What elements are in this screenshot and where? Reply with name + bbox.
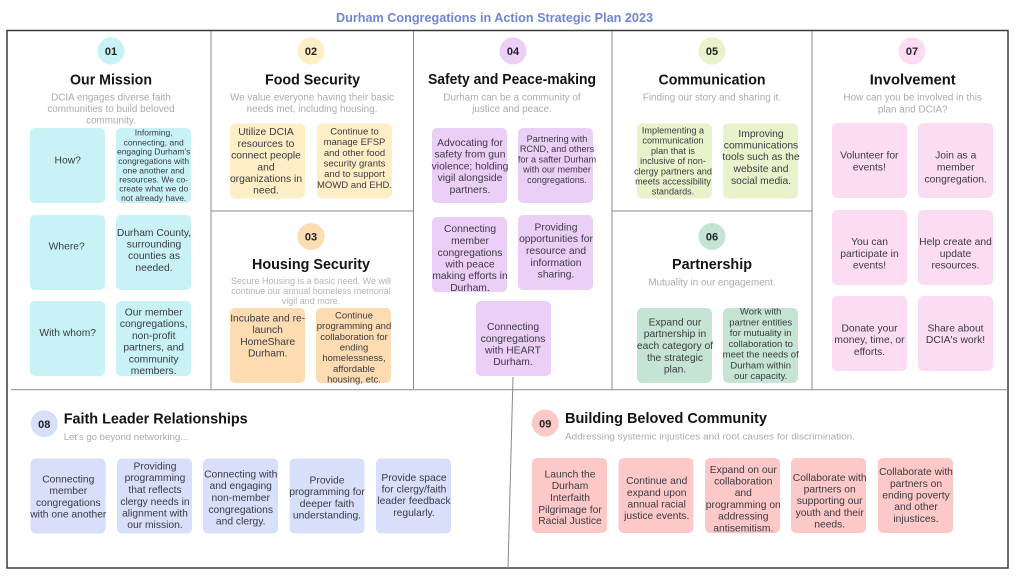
heading: Partnership: Partnership — [672, 256, 752, 273]
number badge 09: 09 — [539, 418, 551, 430]
card: ending homelessness: programming and — [317, 321, 391, 332]
card: with whom answer: community — [129, 354, 179, 365]
card: connecting members: Connecting — [42, 474, 95, 486]
card: utilize resources: need. — [253, 186, 279, 197]
card: advocating: safety from gun — [435, 150, 506, 160]
card: communications tools — [722, 124, 800, 198]
panel: 08 Faith Leader Relationships — [29, 410, 451, 534]
intro text: DCIA engages diverse faith — [51, 92, 171, 103]
number badge 04: 04 — [507, 46, 520, 58]
card: non-member engagement: Connecting with — [204, 470, 278, 480]
card: With whom?: With whom? — [39, 328, 96, 339]
card: partnering — [518, 128, 596, 203]
card: poverty: Collaborate with — [879, 467, 953, 478]
card: clergy programming: clergy needs in — [120, 497, 190, 508]
card: non-member engagement: and clergy. — [216, 516, 266, 528]
title: Durham Congregations in Action Strategic Plan 2023 — [336, 10, 653, 25]
card: HEART Durham — [476, 301, 551, 376]
number badge 07 — [898, 38, 926, 64]
card: antisemitism — [705, 458, 781, 534]
card: communication plan: plan that is — [651, 146, 695, 156]
card: where answer: Durham County, — [117, 228, 191, 239]
card: ending homelessness — [316, 308, 391, 386]
card: donate: Donate your — [841, 324, 898, 334]
card: partnering: congregations. — [527, 175, 587, 185]
card: connecting members: with one another — [29, 510, 107, 520]
card: youth: supporting our — [797, 496, 863, 507]
card: partnering: for a safter Durham — [518, 154, 596, 164]
number badge 07: 07 — [906, 46, 918, 58]
intro text: communities to build beloved — [47, 104, 175, 115]
card: how answer: resources. We co- — [119, 174, 188, 184]
card: communication plan: clergy partners and — [634, 166, 712, 176]
card: communications tools: Improving — [738, 129, 784, 140]
card: share: Share about — [927, 324, 984, 334]
card: opportunities: opportunities for — [519, 234, 593, 245]
intro text: vigil and more. — [282, 296, 340, 306]
card: connecting members — [29, 458, 107, 534]
card: partnering: Partnering with — [527, 134, 587, 144]
card: clergy programming: our mission. — [127, 520, 183, 531]
card: With whom? — [30, 301, 105, 376]
panel: 01 Our Mission — [30, 38, 191, 377]
card: poverty — [878, 458, 953, 533]
card: resources: resources. — [931, 260, 980, 272]
heading: Building Beloved Community: Building Beloved Community — [565, 410, 768, 427]
card: opportunities: information — [531, 258, 582, 269]
card: with whom answer: partners, and — [123, 343, 184, 354]
number badge 01 — [98, 38, 124, 64]
card: how answer: connecting, and — [124, 137, 184, 147]
card: connecting members: member — [49, 486, 88, 497]
card: how answer — [116, 128, 191, 203]
card: youth: youth and their — [796, 508, 864, 519]
card: Where?: Where? — [49, 242, 85, 252]
number badge 08: 08 — [38, 419, 50, 431]
card: pilgrimage: Racial Justice — [538, 516, 602, 527]
card: How?: How? — [55, 156, 81, 166]
card: utilize resources: Utilize DCIA — [238, 127, 294, 138]
intro text: Addressing systemic injustices and root causes for discrimination. — [565, 432, 855, 442]
heading: Safety and Peace-making: Safety and Peace-making — [428, 71, 596, 88]
card: advocating: Advocating for — [437, 138, 503, 149]
card: expand partnership: the strategic — [647, 353, 703, 364]
card: connecting peace making: with peace — [444, 260, 495, 270]
card: Where? — [30, 215, 105, 290]
card: advocating — [432, 128, 509, 203]
card: feedback: Provide space — [381, 473, 447, 484]
card: connecting peace making: member — [451, 236, 489, 247]
card: partner entities — [723, 307, 799, 383]
card: communication plan — [634, 124, 712, 198]
heading: Housing Security: Housing Security — [252, 256, 371, 273]
card: connecting peace making: Durham. — [450, 283, 490, 294]
card: expand partnership: plan. — [664, 364, 686, 376]
card: antisemitism: programming on — [706, 500, 781, 511]
heading: Communication: Communication — [658, 72, 766, 88]
card: ending homelessness: homelessness, — [322, 353, 386, 364]
card: where answer: surrounding — [127, 240, 181, 250]
intro text: community. — [86, 116, 136, 127]
number badge 05: 05 — [706, 46, 718, 58]
card: pilgrimage — [532, 458, 607, 533]
card: share: DCIA's work! — [926, 335, 985, 346]
card: join — [918, 123, 993, 198]
heading: Involvement: Involvement — [870, 72, 956, 88]
card: connecting peace making: congregations — [438, 248, 502, 259]
card: donate — [832, 296, 907, 371]
number badge 03: 03 — [305, 232, 317, 244]
number badge 09 — [532, 410, 559, 436]
heading: Food Security: Food Security — [265, 72, 361, 88]
card: utilize resources: resources to — [238, 139, 295, 150]
number badge 06 — [698, 223, 726, 250]
card: with whom answer: congregations, — [120, 319, 187, 330]
card: expand partnership — [637, 308, 713, 383]
card: pilgrimage: Launch the — [545, 470, 596, 480]
card: how answer: create what we do — [119, 184, 188, 194]
card: ending homelessness: Continue — [335, 310, 373, 322]
card: partnering: RCND, and others — [520, 144, 595, 154]
card: non-member engagement: and engaging — [209, 481, 272, 492]
card: manage grants: Continue to — [330, 126, 379, 138]
card: manage grants: MOWD and EHD. — [317, 180, 392, 191]
card: racial justice events: Continue and — [626, 476, 688, 487]
card: utilize resources: and — [257, 162, 275, 173]
panel: 06 Partnership — [637, 223, 799, 383]
panel: 03 Housing Security — [230, 223, 391, 386]
card: connecting members: congregations — [36, 498, 101, 509]
card: feedback: for clergy/faith — [382, 484, 447, 496]
number badge 05 — [698, 38, 726, 64]
card: ending homelessness: affordable — [333, 364, 375, 375]
card: partner entities: Work with — [740, 307, 781, 318]
card: feedback — [376, 458, 451, 534]
card: non-member engagement — [203, 458, 278, 534]
card: communications tools: social media. — [731, 176, 791, 187]
card: ending homelessness: housing, etc. — [327, 374, 381, 386]
card: racial justice events: expand upon — [627, 488, 687, 499]
card: clergy programming: Providing — [134, 462, 177, 472]
card: HEART Durham: Connecting — [487, 322, 539, 333]
panel: 02 Food Security — [230, 38, 394, 198]
card: poverty: and other — [894, 502, 938, 513]
card: volunteer: events! — [853, 162, 886, 174]
card: ending homelessness: ending — [340, 342, 368, 354]
card: how answer: not already have. — [121, 193, 186, 203]
card: HomeShare — [230, 308, 305, 383]
card: partner entities: our capacity. — [734, 371, 787, 382]
card: expand partnership: Expand our — [649, 318, 702, 328]
card: resources: update — [940, 249, 972, 260]
card: deeper faith: deeper faith — [300, 499, 354, 510]
card: volunteer — [832, 123, 907, 198]
card: participate: events! — [853, 260, 886, 272]
card: non-member engagement: congregations — [208, 505, 273, 516]
heading: Our Mission: Our Mission — [70, 72, 152, 88]
card: with whom answer: non-profit — [132, 331, 176, 342]
card: racial justice events: justice events. — [623, 511, 689, 522]
card: communication plan: standards. — [652, 186, 694, 196]
card: HomeShare: HomeShare — [240, 337, 295, 348]
card: HomeShare: Durham. — [248, 348, 287, 360]
card: donate: efforts. — [854, 347, 885, 358]
panel: 09 Building Beloved Community — [532, 410, 953, 534]
intro text: Secure Housing is a basic need. We will — [231, 276, 391, 286]
intro text: continue our annual homeless memorial — [231, 286, 391, 296]
intro text: Let's go beyond networking... — [64, 432, 188, 443]
card: pilgrimage: Pilgrimage for — [538, 505, 602, 516]
card: clergy programming: alignment with — [122, 508, 188, 520]
card: partner entities: meet the needs of — [723, 350, 799, 361]
intro text: needs met, including housing. — [247, 104, 377, 115]
card: advocating: vigil alongside — [438, 173, 503, 184]
card: opportunities: Providing — [535, 222, 578, 234]
intro text: Durham can be a community of — [443, 92, 581, 103]
card: antisemitism: and — [735, 488, 752, 499]
heading: Faith Leader Relationships: Faith Leader Relationships — [64, 410, 248, 427]
number badge 02 — [298, 38, 324, 64]
card: participate: You can — [851, 237, 888, 248]
number badge 04 — [500, 38, 526, 64]
panel: 07 Involvement — [832, 38, 993, 371]
intro text: Finding our story and sharing it. — [643, 92, 781, 103]
card: advocating: violence; holding — [432, 162, 509, 172]
intro text: We value everyone having their basic — [230, 92, 394, 103]
card: how answer: one another and — [123, 165, 185, 175]
intro text: Mutuality in our engagement. — [648, 277, 776, 288]
card: How? — [30, 128, 105, 203]
card: pilgrimage: Interfaith — [550, 493, 590, 504]
card: join: member — [937, 162, 975, 174]
card: expand partnership: each category of — [637, 341, 713, 352]
panel: 05 Communication — [634, 38, 800, 198]
panel: 04 Safety and Peace-making — [428, 38, 596, 376]
card: partner entities: partner entities — [729, 317, 792, 328]
card: racial justice events: annual racial — [628, 500, 686, 510]
card: connecting peace making — [432, 217, 508, 294]
card: utilize resources: connect people — [231, 151, 301, 162]
card: opportunities: resource and — [526, 246, 586, 257]
card: antisemitism: antisemitism. — [713, 524, 773, 534]
number badge 02: 02 — [305, 46, 317, 58]
card: ending homelessness: collaboration for — [320, 332, 388, 343]
card: how answer: Informing, — [135, 128, 173, 138]
card: clergy programming: that reflects — [128, 485, 182, 496]
intro text: justice and peace. — [471, 104, 552, 115]
card: connecting peace making: making efforts in — [432, 271, 508, 282]
card: communication plan: Implementing a — [642, 125, 705, 135]
card: poverty: partners on — [890, 479, 942, 490]
card: youth: Collaborate with — [793, 473, 867, 484]
card: participate: participate in — [840, 249, 899, 260]
card: clergy programming: programming — [125, 473, 186, 484]
intro text: plan and DCIA? — [878, 105, 948, 116]
card: HomeShare: Incubate and re- — [230, 314, 305, 324]
card: communication plan: inclusive of non- — [640, 156, 706, 166]
number badge 06: 06 — [706, 232, 718, 244]
card: deeper faith: Provide — [310, 476, 345, 486]
card: participate — [832, 210, 907, 285]
card: racial justice events — [618, 458, 694, 533]
card: youth: partners on — [804, 484, 856, 496]
card: utilize resources: organizations in — [230, 174, 302, 185]
card: HEART Durham: congregations — [481, 334, 545, 345]
card: join: Join as a — [935, 150, 977, 162]
card: join: congregation. — [924, 174, 987, 186]
card: manage grants — [317, 124, 392, 198]
number badge 03 — [298, 223, 324, 250]
card: with whom answer: members. — [131, 366, 177, 377]
card: where answer: counties as — [128, 251, 180, 262]
card: deeper faith: programming for — [289, 487, 365, 498]
card: pilgrimage: Durham — [552, 481, 588, 492]
card: manage grants: and other food — [324, 148, 385, 159]
card: communication plan: communication — [642, 136, 704, 146]
card: poverty: ending poverty — [882, 490, 951, 502]
card: youth: needs. — [814, 520, 845, 530]
number badge 01: 01 — [105, 46, 117, 58]
card: HomeShare: launch — [253, 325, 283, 336]
card: share — [918, 296, 993, 371]
card: antisemitism: collaboration — [714, 476, 773, 488]
card: partner entities: collaboration to — [728, 339, 793, 350]
card: non-member engagement: non-member — [212, 493, 270, 504]
card: poverty: injustices. — [893, 514, 939, 525]
card: how answer: engaging Durham's — [117, 147, 190, 157]
card: communications tools: communications — [724, 140, 798, 152]
card: HEART Durham: with HEART — [484, 346, 542, 356]
card: feedback: regularly. — [393, 508, 435, 519]
card: partner entities: for mutuality in — [730, 328, 792, 339]
card: with whom answer: Our member — [125, 308, 183, 318]
card: partnering: with our member — [522, 164, 591, 174]
card: communications tools: website and — [733, 164, 789, 175]
card: expand partnership: partnership in — [644, 329, 706, 340]
card: communication plan: meets accessibility — [635, 176, 711, 186]
card: deeper faith: understanding. — [293, 510, 361, 522]
card: connecting peace making: Connecting — [444, 224, 496, 235]
card: partner entities: Durham within — [730, 360, 791, 371]
card: donate: money, time, or — [834, 335, 905, 346]
card: manage grants: and to support — [324, 169, 385, 180]
card: resources: Help create and — [919, 237, 992, 248]
card: manage grants: manage EFSP — [324, 137, 385, 148]
card: with whom answer — [116, 301, 191, 377]
card: feedback: leader feedback — [377, 496, 451, 507]
card: youth — [791, 458, 867, 533]
card: clergy programming — [117, 458, 192, 534]
intro text: How can you be involved in this — [844, 93, 982, 104]
card: antisemitism: Expand on our — [710, 465, 777, 476]
card: where answer — [116, 215, 191, 290]
card: opportunities — [518, 215, 593, 290]
card: advocating: partners. — [450, 185, 490, 196]
card: communications tools: tools such as the — [722, 152, 800, 163]
card: how answer: congregations with — [118, 156, 189, 166]
card: manage grants: security grants — [324, 158, 386, 170]
card: HEART Durham: Durham. — [493, 357, 533, 368]
card: utilize resources — [230, 124, 305, 198]
card: antisemitism: addressing — [718, 512, 769, 522]
card: resources — [918, 210, 993, 285]
number badge 08 — [31, 410, 58, 437]
card: volunteer: Volunteer for — [840, 150, 899, 162]
card: where answer: needed. — [135, 263, 173, 274]
card: opportunities: sharing. — [538, 270, 574, 280]
card: deeper faith — [289, 458, 365, 534]
